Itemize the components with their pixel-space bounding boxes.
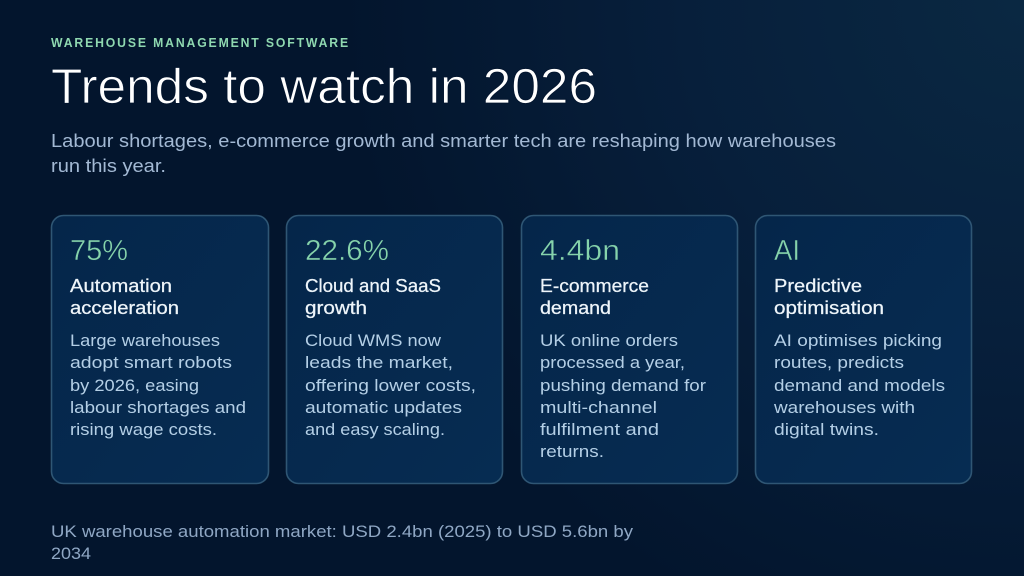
card body: multi-channel [540, 398, 657, 417]
subtitle: Labour shortages, e-commerce growth and smarter tech are reshaping how warehouses [51, 130, 836, 151]
stat: 4.4bn: 4.4bn [540, 235, 620, 267]
card body: by 2026, easing [70, 376, 199, 395]
card body: processed a year, [540, 353, 685, 372]
stat: AI: AI [774, 235, 800, 267]
card heading [305, 276, 441, 318]
card body: fulfilment and [540, 420, 659, 439]
card body: demand and models [774, 376, 945, 395]
card body: Cloud WMS now [305, 331, 442, 350]
card body: warehouses with [773, 398, 915, 417]
card body: routes, predicts [774, 353, 904, 372]
card body: labour shortages and [70, 398, 246, 417]
footer note [51, 522, 634, 563]
card heading: Automation [70, 276, 172, 296]
subtitle [51, 130, 836, 176]
panel: cloud and SaaS growth [286, 216, 502, 484]
card heading [540, 276, 649, 318]
card body: UK online orders [540, 331, 678, 350]
card heading: Predictive [774, 276, 862, 296]
footer note: 2034 [51, 544, 91, 563]
stat: 75%: 75% [70, 235, 128, 267]
card body: Large warehouses [70, 331, 220, 350]
card body: offering lower costs, [305, 376, 476, 395]
card heading: E-commerce [540, 276, 649, 296]
card body: digital twins. [774, 420, 879, 439]
subtitle: run this year. [51, 155, 166, 176]
card heading: demand [540, 298, 611, 318]
card body: AI optimises picking [774, 331, 942, 350]
card body: returns. [540, 442, 604, 461]
footer note: UK warehouse automation market: USD 2.4bn (2025) to USD 5.6bn by [51, 522, 634, 541]
card heading: Cloud and SaaS [305, 276, 441, 296]
card body [305, 331, 476, 439]
card body: leads the market, [305, 353, 453, 372]
card heading [774, 276, 884, 318]
title: Trends to watch in 2026 [51, 60, 597, 114]
eyebrow: WAREHOUSE MANAGEMENT SOFTWARE [51, 36, 350, 50]
card body: automatic updates [305, 398, 462, 417]
panel: predictive optimisation [756, 216, 972, 484]
card body [773, 331, 945, 439]
card heading: acceleration [70, 298, 179, 318]
card body: rising wage costs. [70, 420, 217, 439]
card body [540, 331, 706, 461]
card heading: growth [305, 298, 367, 318]
card heading [70, 276, 179, 318]
stat: 22.6%: 22.6% [305, 235, 389, 267]
card heading: optimisation [774, 298, 884, 318]
panel: e-commerce demand [522, 216, 738, 484]
panel: automation acceleration [52, 216, 268, 484]
card body: pushing demand for [540, 376, 706, 395]
card body [70, 331, 246, 439]
card body: adopt smart robots [70, 353, 232, 372]
card body: and easy scaling. [305, 420, 445, 439]
